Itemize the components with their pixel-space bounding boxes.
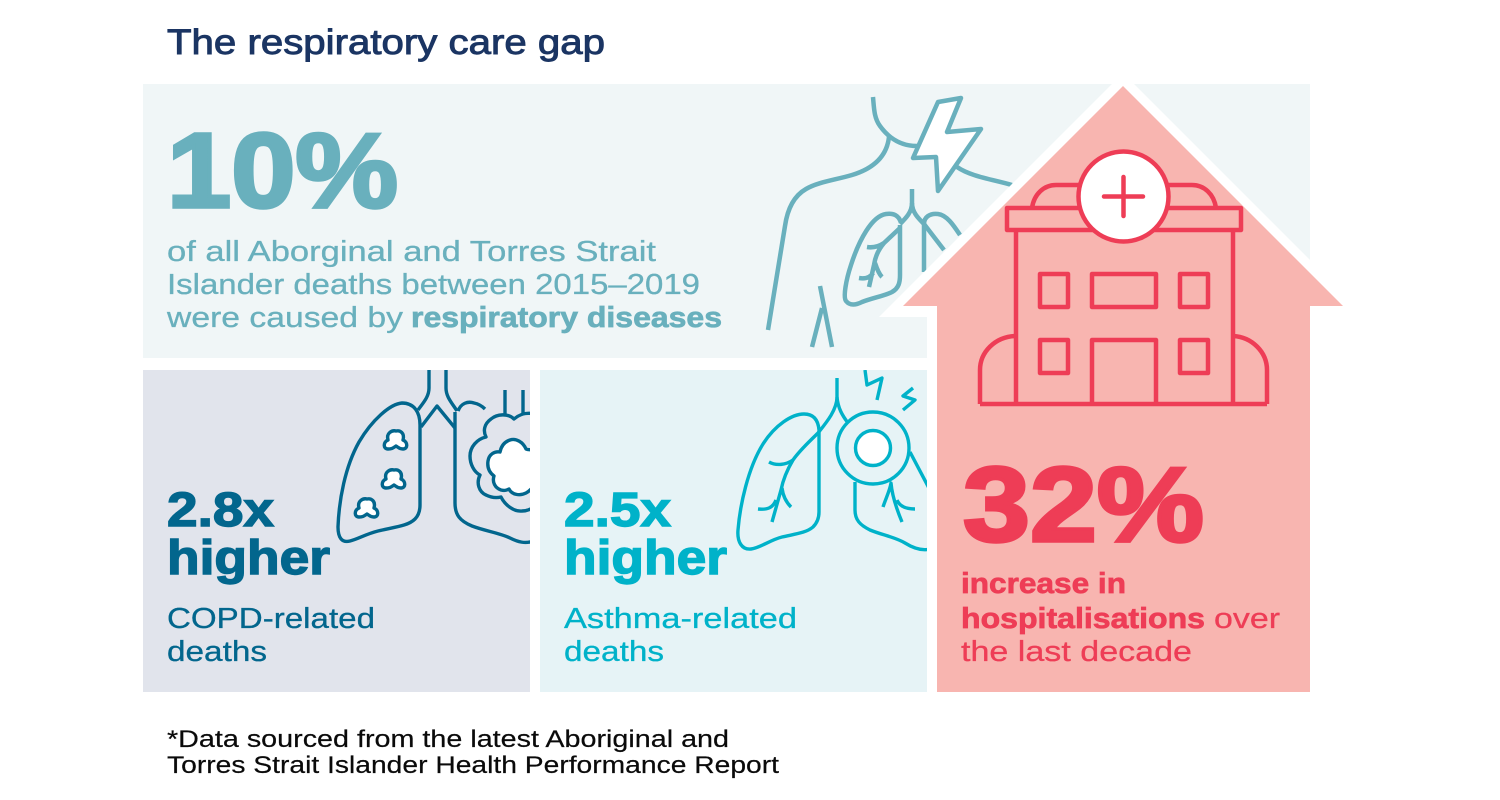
title: The respiratory care gap <box>167 23 605 62</box>
description: hospitalisations <box>961 568 1280 668</box>
icon: torso with lungs and lightning bolt <box>768 97 1012 347</box>
stat: 2.5x higher <box>564 484 727 585</box>
panel: hospital house <box>879 73 1367 692</box>
label: Asthma-related deaths <box>564 603 797 668</box>
description: hospitalisations: over <box>1214 603 1280 635</box>
label: COPD-related deaths: deaths <box>167 636 267 668</box>
label: Asthma-related deaths: deaths <box>564 636 664 668</box>
footnote: Torres Strait Islander Health Performance Report <box>167 752 779 779</box>
panel: Asthma deaths <box>540 370 930 692</box>
label: COPD-related deaths: COPD-related <box>167 603 375 635</box>
description: hospitalisations: increase in <box>961 568 1126 600</box>
description: respiratory deaths: Islander deaths between 2015–2019 <box>167 269 700 301</box>
description: respiratory deaths <box>166 236 722 334</box>
description: hospitalisations: hospitalisations <box>961 603 1205 635</box>
description: hospitalisations: the last decade <box>961 636 1192 668</box>
description: respiratory deaths: respiratory diseases <box>411 302 722 334</box>
footnote <box>167 726 779 779</box>
label: COPD-related deaths <box>167 603 375 668</box>
stat: 2.8x higher: higher <box>167 532 330 585</box>
stat: 2.5x higher: higher <box>564 532 727 585</box>
panel: 10% respiratory deaths <box>143 84 1310 358</box>
panel: COPD deaths <box>143 368 534 692</box>
icon: asthma lungs <box>738 370 930 550</box>
label: Asthma-related deaths: Asthma-related <box>564 603 797 635</box>
stat: 2.5x higher: 2.5x <box>564 484 671 537</box>
stat: 32%: 32% <box>963 446 1204 564</box>
footnote: *Data sourced from the latest Aboriginal and <box>167 726 729 753</box>
icon: hospital building <box>980 152 1267 404</box>
stat: 2.8x higher <box>167 484 330 585</box>
description: respiratory deaths: were caused by <box>166 302 404 334</box>
stat: 10%: 10% <box>167 112 398 230</box>
icon: COPD lungs <box>338 368 534 542</box>
description: respiratory deaths: of all Aborginal and Torres Strait <box>167 236 656 268</box>
stat: 2.8x higher: 2.8x <box>167 484 274 537</box>
